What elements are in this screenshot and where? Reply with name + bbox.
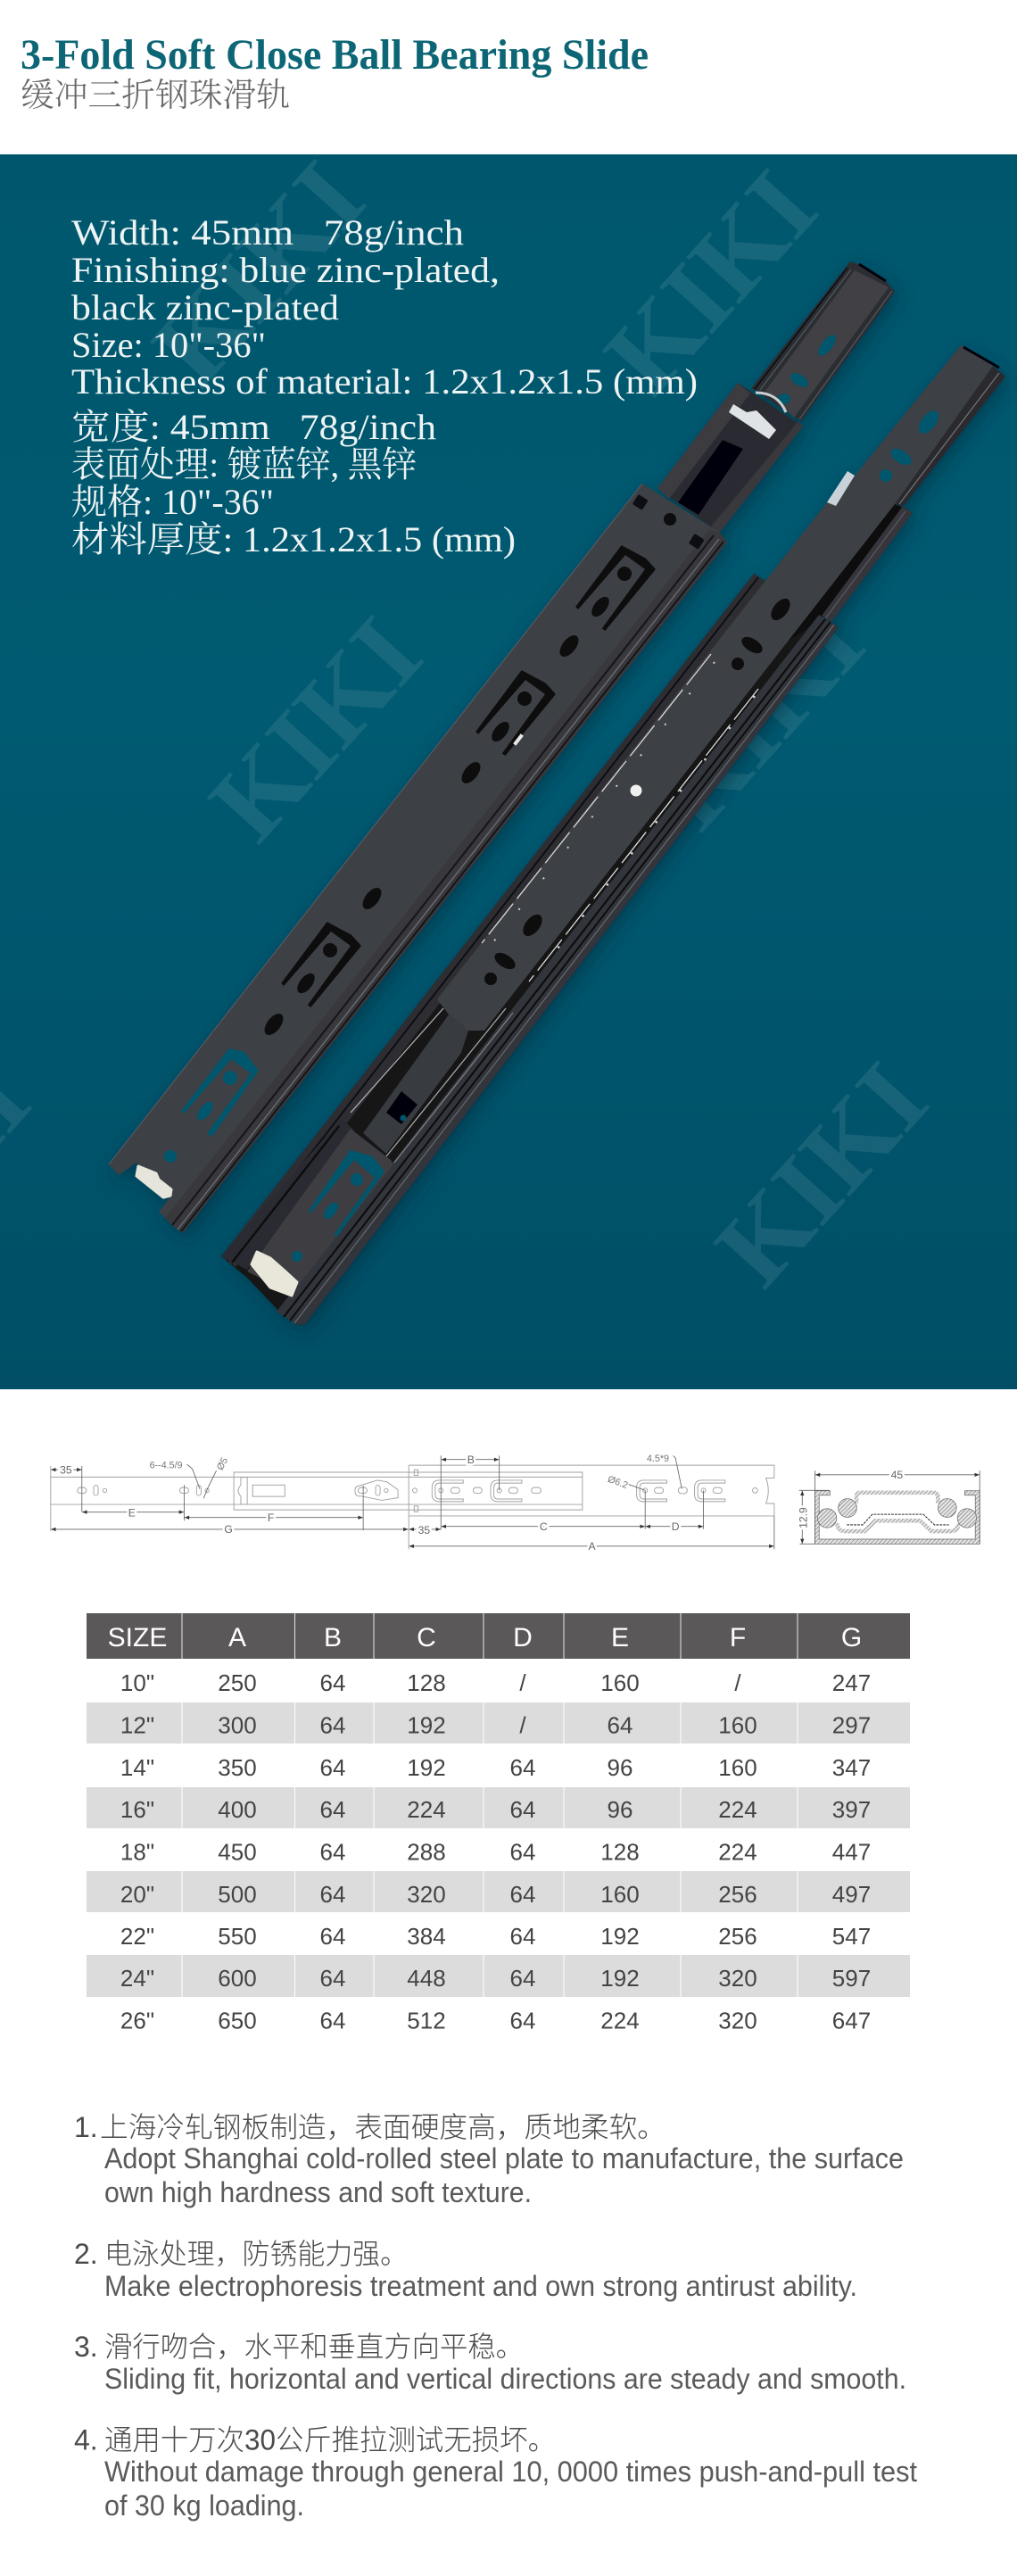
row 18 inch: 224 <box>718 1838 757 1865</box>
row 20 inch: 500 <box>218 1881 257 1908</box>
feature 2: 2. <box>74 2238 98 2270</box>
row 14 inch: 350 <box>218 1754 257 1781</box>
row 26 inch: 320 <box>718 2008 757 2034</box>
extension lines and dimension lines <box>51 1455 774 1549</box>
banner background <box>0 154 1017 1389</box>
row 20 inch: 64 <box>320 1881 345 1908</box>
row 18 inch: 447 <box>832 1838 871 1865</box>
specification text, English: Size: 10"-36" <box>71 325 266 365</box>
row 16 inch: 397 <box>832 1796 871 1823</box>
row 12 inch: 64 <box>320 1711 345 1738</box>
specification text, Chinese <box>71 407 516 559</box>
feature 2: Make electrophoresis treatment and own strong antirust ability. <box>104 2270 857 2302</box>
row 20 inch: 256 <box>718 1881 757 1908</box>
gray block at bottom of inner rail <box>351 1008 513 1163</box>
row 18 inch: 64 <box>320 1838 345 1865</box>
row 22 inch: 64 <box>320 1923 345 1950</box>
dimension labels: B <box>467 1454 475 1466</box>
row 24 inch <box>120 1965 871 1992</box>
table header: C <box>417 1623 436 1652</box>
row 18 inch: 288 <box>407 1838 446 1865</box>
row 22 inch: 64 <box>510 1923 535 1950</box>
feature 1: own high hardness and soft texture. <box>104 2176 532 2208</box>
row 18 inch: 450 <box>218 1838 257 1865</box>
mounting holes, left slide <box>164 494 705 1163</box>
row 24 inch: 448 <box>407 1965 446 1992</box>
row 14 inch: 64 <box>320 1754 345 1781</box>
row 12 inch: 192 <box>407 1711 446 1738</box>
row 20 inch: 64 <box>510 1881 535 1908</box>
rail outlines <box>51 1465 774 1549</box>
row 14 inch <box>120 1754 871 1781</box>
specification text, Chinese: 材料厚度: 1.2x1.2x1.5 (mm) <box>71 519 516 559</box>
table header: G <box>841 1623 862 1652</box>
right slide: open drawer slide inner view <box>221 345 1005 1325</box>
feature 3: 3. <box>74 2331 98 2363</box>
row 22 inch: 192 <box>600 1923 640 1950</box>
dimension labels: G <box>224 1523 233 1536</box>
table header: D <box>513 1623 533 1652</box>
row 26 inch: 64 <box>510 2008 535 2034</box>
slotted holes <box>78 1480 757 1502</box>
lower rail <box>109 484 727 1233</box>
row 10 inch: 10" <box>120 1669 154 1696</box>
row 14 inch: 14" <box>120 1754 154 1781</box>
row 14 inch: 96 <box>608 1754 633 1781</box>
specification text, English: Thickness of material: 1.2x1.2x1.5 (mm) <box>71 361 698 402</box>
row 16 inch: 224 <box>718 1796 757 1823</box>
feature 3: 滑行吻合，水平和垂直方向平稳。 <box>104 2331 524 2363</box>
subtitle: 缓冲三折钢珠滑轨 <box>21 78 290 114</box>
row 16 inch <box>120 1796 871 1823</box>
row 18 inch <box>120 1838 871 1865</box>
table header: A <box>228 1623 246 1652</box>
feature 4: of 30 kg loading. <box>104 2489 304 2522</box>
row 22 inch: 256 <box>718 1923 757 1950</box>
row 14 inch: 160 <box>718 1754 757 1781</box>
row 14 inch: 64 <box>510 1754 535 1781</box>
outer rail strips <box>221 574 839 1325</box>
table header: F <box>730 1623 746 1652</box>
watermarks: KIKI <box>693 1040 950 1308</box>
cross-section dimensions <box>797 1469 980 1544</box>
dimension labels: D <box>672 1520 680 1533</box>
row 10 inch: 247 <box>832 1669 871 1696</box>
inner rail <box>437 345 1005 1031</box>
white plastic stop, right slide <box>252 1252 297 1296</box>
feature 3: Sliding fit, horizontal and vertical directions are steady and smooth. <box>104 2363 906 2395</box>
inner dashed strip <box>847 1514 949 1525</box>
row 12 inch: 64 <box>608 1711 633 1738</box>
watermarks: KIKI <box>583 148 839 416</box>
row 22 inch: 550 <box>218 1923 257 1950</box>
row 20 inch: 160 <box>600 1881 640 1908</box>
row 20 inch <box>120 1881 871 1908</box>
row 10 inch: 64 <box>320 1669 345 1696</box>
row 26 inch: 26" <box>120 2008 154 2034</box>
row 20 inch: 497 <box>832 1881 871 1908</box>
panel: product banner <box>0 139 1017 1389</box>
row 18 inch: 128 <box>600 1838 640 1865</box>
alternating row shading <box>87 1702 910 1997</box>
row 24 inch: 600 <box>218 1965 257 1992</box>
middle rail <box>785 504 913 642</box>
feature 2 <box>74 2238 857 2302</box>
feature 1: Adopt Shanghai cold-rolled steel plate to manufacture, the surface <box>104 2142 904 2174</box>
row 24 inch: 24" <box>120 1965 154 1992</box>
watermarks: KIKI <box>187 595 444 863</box>
table header: B <box>324 1623 342 1652</box>
cross-section dimensions: 12.9 <box>797 1507 809 1528</box>
top rail <box>751 261 895 421</box>
table header: E <box>611 1623 629 1652</box>
row 10 inch: 128 <box>407 1669 446 1696</box>
lower face and strip <box>221 1118 393 1294</box>
specification text, Chinese: 宽度: 45mm 78g/inch <box>71 407 436 447</box>
row 26 inch: 224 <box>600 2008 640 2034</box>
outer chassis <box>221 574 839 1325</box>
light metal patch <box>827 471 855 506</box>
dimension labels: E <box>128 1507 136 1520</box>
specification text, English: Width: 45mm 78g/inch <box>71 212 464 253</box>
specification text, English: Finishing: blue zinc-plated, <box>71 250 500 290</box>
feature list <box>74 2111 917 2522</box>
feature 4: 通用十万次30公斤推拉测试无损坏。 <box>104 2423 556 2456</box>
specification text, English <box>71 212 698 402</box>
dimension labels: Ø6.2 <box>606 1474 629 1491</box>
feature 1: 上海冷轧钢板制造，表面硬度高，质地柔软。 <box>100 2111 666 2143</box>
row 12 inch <box>120 1711 871 1738</box>
row 20 inch: 320 <box>407 1881 446 1908</box>
dimension labels <box>60 1454 680 1553</box>
dimension labels: F <box>268 1512 274 1524</box>
row 16 inch: 16" <box>120 1796 154 1823</box>
mounting holes, right slide <box>484 407 943 985</box>
middle rail with window and white catch <box>657 383 803 534</box>
row 22 inch: 547 <box>832 1923 871 1950</box>
row 16 inch: 64 <box>510 1796 535 1823</box>
specification text, English: black zinc-plated <box>71 287 339 327</box>
row 26 inch: 650 <box>218 2008 257 2034</box>
row 18 inch: 64 <box>510 1838 535 1865</box>
white plastic stop, left slide <box>136 1166 171 1197</box>
dimension labels: 35 <box>60 1463 72 1476</box>
watermarks <box>0 139 950 1309</box>
row 10 inch: / <box>519 1669 526 1696</box>
outer hatched profile <box>815 1491 980 1544</box>
feature 3 <box>74 2331 906 2395</box>
row 14 inch: 347 <box>832 1754 871 1781</box>
dimension labels: 4.5*9 <box>647 1454 669 1464</box>
specification text, Chinese: 表面处理: 镀蓝锌, 黑锌 <box>71 444 417 485</box>
row 26 inch <box>120 2008 871 2034</box>
row 20 inch: 20" <box>120 1881 154 1908</box>
row 24 inch: 597 <box>832 1965 871 1992</box>
row 24 inch: 64 <box>510 1965 535 1992</box>
ball bearings <box>817 1499 977 1528</box>
technical drawing: side view with dimensions <box>51 1454 774 1553</box>
title: 3-Fold Soft Close Ball Bearing Slide <box>21 31 649 79</box>
dimension labels: C <box>540 1520 548 1533</box>
row 12 inch: 297 <box>832 1711 871 1738</box>
dimension labels: A <box>589 1540 597 1553</box>
technical drawing: cross-section profile <box>797 1469 980 1544</box>
row 16 inch: 96 <box>608 1796 633 1823</box>
dimension labels: 35 <box>418 1524 430 1536</box>
row 18 inch: 18" <box>120 1838 154 1865</box>
row 26 inch: 64 <box>320 2008 345 2034</box>
size table <box>87 1613 910 2034</box>
row 22 inch: 22" <box>120 1923 154 1950</box>
watermarks: KIKI <box>630 584 887 851</box>
row 22 inch <box>120 1923 871 1950</box>
dimension labels: 6--4.5/9 <box>150 1461 183 1471</box>
row 10 inch: 250 <box>218 1669 257 1696</box>
table header <box>87 1613 910 1659</box>
row 24 inch: 192 <box>600 1965 640 1992</box>
row 16 inch: 400 <box>218 1796 257 1823</box>
row 24 inch: 64 <box>320 1965 345 1992</box>
row 12 inch: 160 <box>718 1711 757 1738</box>
row 26 inch: 512 <box>407 2008 446 2034</box>
row 12 inch: 300 <box>218 1711 257 1738</box>
feature 2: 电泳处理，防锈能力强。 <box>104 2238 408 2270</box>
row 10 inch <box>120 1669 871 1696</box>
row 14 inch: 192 <box>407 1754 446 1781</box>
left slide: closed drawer slide face view <box>109 261 895 1233</box>
feature 4: 4. <box>74 2423 98 2456</box>
row 10 inch: 160 <box>600 1669 640 1696</box>
feature 1: 1. <box>74 2111 98 2143</box>
row 12 inch: 12" <box>120 1711 154 1738</box>
table header: SIZE <box>108 1623 167 1652</box>
row 10 inch: / <box>734 1669 741 1696</box>
ball bearing highlights <box>482 654 758 982</box>
inner hatched profile <box>838 1493 958 1531</box>
specification text, Chinese: 规格: 10"-36" <box>71 482 274 522</box>
feature 1 <box>74 2111 904 2208</box>
row 26 inch: 647 <box>832 2008 871 2034</box>
dimension labels: Ø5 <box>215 1456 230 1472</box>
row 16 inch: 64 <box>320 1796 345 1823</box>
row 12 inch: / <box>519 1711 526 1738</box>
cross-section dimensions: 45 <box>891 1469 903 1481</box>
feature 4 <box>74 2423 917 2522</box>
row 16 inch: 224 <box>407 1796 446 1823</box>
row 22 inch: 384 <box>407 1923 446 1950</box>
watermarks: KIKI <box>130 139 387 407</box>
feature 4: Without damage through general 10, 0000 times push-and-pull test <box>104 2456 917 2488</box>
row 24 inch: 320 <box>718 1965 757 1992</box>
